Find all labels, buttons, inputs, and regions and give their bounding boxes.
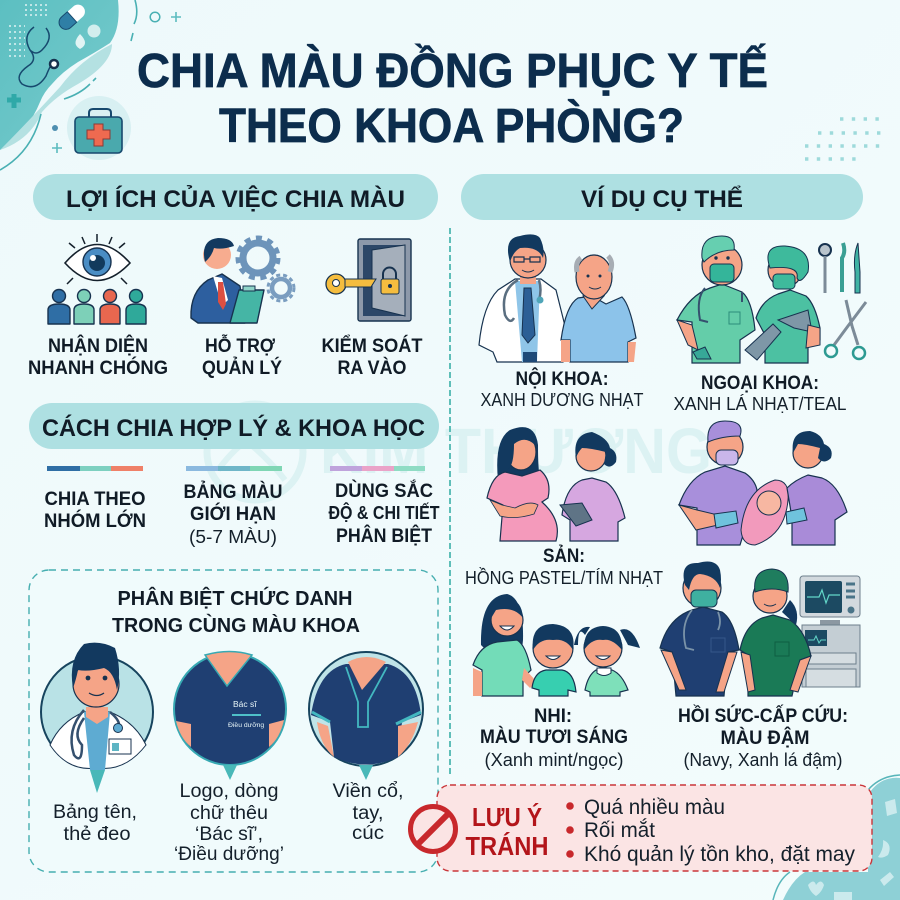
icon: scrubs with embroidered text [174, 652, 286, 780]
divider [449, 228, 451, 775]
icon: prohibition sign [410, 806, 456, 852]
icon: stethoscope [19, 27, 52, 87]
icon: doctor badge circle [41, 643, 153, 793]
figure: nurse with tablet [560, 432, 625, 541]
watermark [207, 404, 712, 500]
label: nhận diện nhanh chóng: NHANH CHÓNG [28, 357, 168, 379]
figure: nurse [745, 246, 820, 363]
figure: purple nurse [786, 431, 847, 545]
figure: navy doctor [660, 562, 739, 696]
heading: cách chia: CÁCH CHIA HỢP LÝ & KHOA HỌC [42, 414, 425, 442]
icon: first aid kit [67, 96, 131, 160]
label: kiểm soát ra vào: RA VÀO [338, 357, 406, 379]
label: hồi sức cấp cứu: MÀU ĐẬM [720, 727, 810, 749]
method: chia theo nhóm lớn [44, 466, 146, 532]
scene: hồi sức cấp cứu [660, 562, 860, 770]
caption: bảng tên: thẻ đeo [64, 824, 130, 845]
icon: pill [56, 2, 88, 32]
label: nhận diện nhanh chóng [28, 335, 168, 379]
figure: mother [473, 594, 537, 696]
label: sản: SẢN: [543, 545, 585, 567]
title: THEO KHOA PHÒNG? [219, 98, 684, 153]
label: nhi: MÀU TƯƠI SÁNG [480, 726, 628, 748]
figure: green nurse [740, 569, 811, 696]
label: hỗ trợ quản lý: HỖ TRỢ [205, 335, 276, 357]
title [137, 43, 768, 153]
figure: girl [574, 626, 640, 696]
caption: viền cổ tay cúc: Viền cổ, [332, 781, 404, 802]
panel heading: PHÂN BIỆT CHỨC DANH [118, 586, 352, 610]
label: nhi: NHI: [534, 706, 572, 727]
icon: ICU monitor [800, 576, 860, 687]
decoration: bottom-right blob [773, 775, 900, 900]
label: nhi [480, 706, 628, 770]
figure: purple surgeon [679, 421, 757, 545]
method: bảng màu giới hạn [184, 466, 282, 547]
decoration: top-right dot grid [805, 119, 885, 159]
scene: sản team [679, 421, 847, 545]
icon: manager with gears [191, 238, 294, 323]
label: sản: HỒNG PASTEL/TÍM NHẠT [465, 567, 663, 588]
caption: logo dòng chữ thêu [174, 781, 284, 865]
callout list [566, 796, 855, 866]
label: ngoại khoa [674, 373, 846, 414]
callout heading: LƯU Ý [472, 802, 542, 832]
caption: viền cổ tay cúc: tay, [352, 803, 384, 824]
callout list: Khó quản lý tồn kho, đặt may [584, 843, 855, 866]
label: ngoại khoa: NGOẠI KHOA: [701, 373, 819, 394]
figure: baby [741, 480, 788, 545]
method: chia theo nhóm lớn: CHIA THEO [44, 489, 146, 510]
label: nội khoa: NỘI KHOA: [516, 368, 608, 390]
method: bảng màu giới hạn: GIỚI HẠN [190, 503, 276, 525]
icon: scrubs with embroidered text: Điều dưỡng [228, 720, 264, 729]
label: nhi: (Xanh mint/ngọc) [484, 750, 624, 770]
callout list: Quá nhiều màu [584, 796, 725, 819]
caption: viền cổ tay cúc [332, 781, 404, 844]
scene: ngoại khoa [674, 236, 866, 414]
caption: bảng tên [53, 802, 137, 845]
icon: eye and people [48, 234, 146, 324]
callout list: Rối mắt [584, 819, 655, 842]
icon: scrubs with embroidered text: Bác sĩ [233, 699, 257, 709]
scene: nội khoa [479, 234, 644, 410]
panel: phân biệt chức danh [29, 570, 438, 872]
heading: lợi ích: LỢI ÍCH CỦA VIỆC CHIA MÀU [66, 184, 405, 213]
decoration: top-left medical blob [0, 0, 181, 170]
label: nhận diện nhanh chóng: NHẬN DIỆN [48, 335, 148, 357]
method: dùng sắc độ [328, 466, 440, 547]
label: hỗ trợ quản lý [202, 335, 282, 379]
label: hồi sức cấp cứu [678, 705, 848, 770]
caption: bảng tên: Bảng tên, [53, 802, 137, 823]
figure: pregnant woman [487, 427, 557, 541]
heading: ví dụ cụ thể [461, 174, 863, 220]
label: hỗ trợ quản lý: QUẢN LÝ [202, 357, 282, 379]
method: dùng sắc độ: DÙNG SẮC [335, 480, 433, 502]
label: kiểm soát ra vào: KIỂM SOÁT [322, 335, 423, 357]
method: bảng màu giới hạn: BẢNG MÀU [184, 481, 282, 503]
method: chia theo nhóm lớn: NHÓM LỚN [44, 510, 146, 532]
icon: surgical tools [819, 243, 866, 359]
watermark: KIM THƯƠNG [320, 415, 712, 487]
caption: logo dòng chữ thêu: ‘Điều dưỡng’ [174, 844, 284, 865]
method: bảng màu giới hạn: (5-7 MÀU) [189, 527, 277, 547]
callout: lưu ý tránh [410, 785, 872, 871]
heading: ví dụ cụ thể: VÍ DỤ CỤ THỂ [581, 185, 743, 213]
figure: surgeon [677, 236, 755, 363]
scene: nhi [473, 594, 640, 770]
icon: scrubs with piping [309, 652, 423, 780]
callout heading [466, 802, 548, 861]
method: dùng sắc độ: PHÂN BIỆT [336, 525, 432, 547]
label: sản [465, 545, 663, 588]
figure: patient [561, 255, 636, 362]
label: nội khoa: XANH DƯƠNG NHẠT [480, 390, 644, 410]
label: hồi sức cấp cứu: (Navy, Xanh lá đậm) [684, 750, 842, 770]
heading: cách chia [29, 403, 439, 449]
label: hồi sức cấp cứu: HỒI SỨC-CẤP CỨU: [678, 705, 848, 727]
method: dùng sắc độ: ĐỘ & CHI TIẾT [328, 502, 440, 523]
figure: doctor [479, 234, 566, 362]
heading: lợi ích [33, 174, 438, 220]
figure: boy [532, 624, 576, 696]
label: nội khoa [480, 368, 644, 410]
scene: sản [465, 427, 663, 588]
caption: logo dòng chữ thêu: Logo, dòng [180, 781, 278, 802]
caption: logo dòng chữ thêu: chữ thêu [190, 803, 268, 824]
caption: viền cổ tay cúc: cúc [352, 823, 384, 844]
caption: logo dòng chữ thêu: ‘Bác sĩ’, [195, 824, 263, 845]
title: CHIA MÀU ĐỒNG PHỤC Y TẾ [137, 43, 768, 98]
icon: door, key and lock [326, 239, 411, 321]
label: ngoại khoa: XANH LÁ NHẠT/TEAL [674, 394, 846, 414]
callout heading: TRÁNH [466, 831, 548, 861]
panel heading: TRONG CÙNG MÀU KHOA [112, 613, 360, 637]
label: kiểm soát ra vào [322, 335, 423, 379]
panel heading [112, 586, 360, 637]
